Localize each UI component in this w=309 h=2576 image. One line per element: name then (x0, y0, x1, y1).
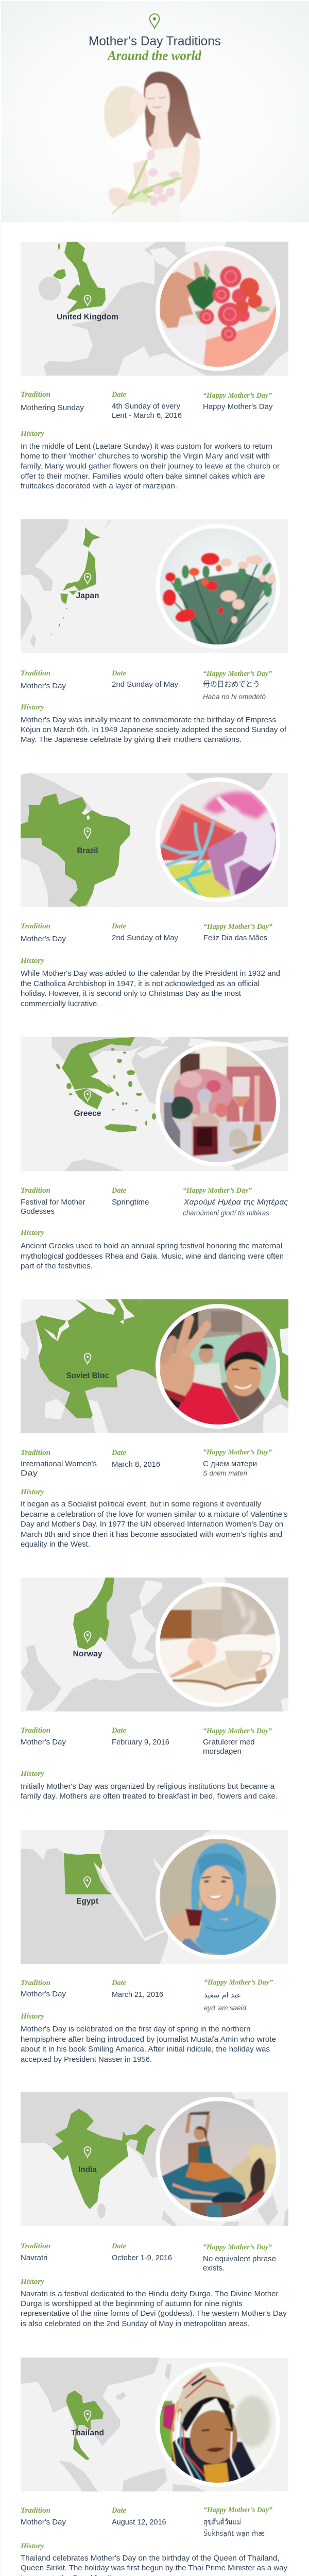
greeting: Haha no hi omedetō (203, 693, 266, 701)
greeting: “Happy Mother’s Day” (203, 923, 272, 931)
date (111, 1979, 163, 1999)
country label: Egypt (76, 1897, 98, 1906)
greeting: สุขสันต์วันแม่ (203, 2518, 241, 2527)
history: History (20, 1229, 44, 1237)
tradition: Tradition (21, 669, 50, 677)
history: History (20, 1488, 44, 1496)
section: United Kingdom (20, 242, 288, 490)
date (111, 2242, 172, 2262)
greeting: Gratulerer med (203, 1738, 255, 1747)
history: family. Many would gather flowers on their journey to leave at the church or (21, 463, 280, 471)
date: Date (111, 391, 126, 399)
date (111, 391, 182, 420)
country label: Brazil (77, 846, 98, 855)
date: Date (111, 1187, 126, 1195)
map: Brazil (21, 773, 288, 907)
section: India (20, 2092, 288, 2328)
tradition (21, 922, 66, 943)
history: the Catholica Archbishop in 1947, it is not acknowledged as an official (21, 980, 260, 988)
history: Initially Mother's Day was organized by religious institutions but became a (21, 1783, 275, 1791)
history: History (20, 957, 44, 965)
tradition (21, 1979, 66, 1998)
history: is also celebrated on the 2nd Sunday of May in metropolitan areas. (21, 2320, 250, 2328)
map: Norway (21, 1578, 288, 1711)
tradition: Day (21, 1469, 38, 1478)
greeting (203, 2506, 272, 2538)
greeting (183, 1187, 288, 1217)
date: Date (111, 669, 126, 677)
greeting (203, 392, 273, 411)
history: family day. Mothers are often treated to breakfast in bed, flowers and cake. (21, 1792, 278, 1801)
pin: Egypt (84, 1877, 91, 1887)
history: Queen Sirikit. The holiday was first begun by the Thai Prime Minister as a way (21, 2564, 288, 2572)
tradition (21, 1449, 97, 1478)
date: Springtime (112, 1198, 149, 1207)
map: United Kingdom (21, 242, 288, 376)
pin: United Kingdom (84, 295, 91, 306)
greeting: S̄uk̄hs̄ạn̒t wạn m̀æ (203, 2530, 265, 2538)
pin: Soviet Bloc (84, 1353, 91, 1364)
tradition: Tradition (21, 1187, 50, 1195)
date (111, 922, 178, 942)
history (20, 2012, 276, 2064)
history: mythological goddesses Rhea and Gaia. Music, wine and dancing were often (21, 1252, 284, 1261)
country label: United Kingdom (57, 313, 118, 321)
greeting: “Happy Mother’s Day” (203, 392, 272, 400)
greeting: С днем матери (203, 1460, 257, 1468)
photo: table with decanter (156, 1042, 280, 1166)
pin: Thailand (84, 2411, 91, 2421)
subtitle: Around the world (107, 48, 202, 63)
country label: Soviet Bloc (66, 1371, 109, 1380)
greeting (203, 1448, 272, 1477)
map: India (21, 2092, 288, 2226)
history: History (20, 430, 44, 438)
greeting (203, 2243, 276, 2273)
greeting: charoúmeni giortí tis mitéras (183, 1209, 269, 1217)
history: home to their 'mother' churches to worship the Virgin Mary and visit with (21, 452, 270, 461)
history: accepted by President Nasser in 1956. (21, 2056, 152, 2064)
history: History (20, 1770, 44, 1778)
greeting: “Happy Mother’s Day” (183, 1187, 252, 1195)
section: Japan (20, 519, 288, 744)
history: part of the festivities. (21, 1262, 93, 1270)
history: While Mother's Day was added to the calendar by the President in 1932 and (21, 970, 280, 978)
date (111, 2506, 166, 2527)
date: March 8, 2016 (112, 1460, 160, 1469)
photo: woman in traditional headdress (156, 2362, 280, 2487)
photo: carnations (156, 524, 280, 649)
history: History (20, 2542, 44, 2550)
country label: India (78, 2165, 97, 2174)
section: Norway (20, 1578, 288, 1801)
tradition (21, 1187, 85, 1216)
date: Date (111, 1449, 126, 1457)
section: Brazil (20, 773, 288, 1008)
pin: Brazil (84, 828, 91, 838)
hero photo: mother and daughter with tulips (101, 72, 201, 222)
photo: tea cup on open book (156, 1582, 280, 1707)
pin: Greece (84, 1091, 91, 1101)
history: March 8th and since then it has become associated with women's rights and (21, 1531, 282, 1539)
history: History (20, 2012, 44, 2021)
history: Navratri is a festival dedicated to the Hindu deity Durga. The Divine Mother (21, 2290, 279, 2298)
history: fruitcakes decorated with a layer of marzipan. (21, 482, 177, 490)
tradition: Mother's Day (21, 1990, 66, 1998)
section: Thailand (20, 2358, 288, 2576)
date: Lent - March 6, 2016 (112, 411, 182, 420)
tradition: Mother's Day (21, 1738, 66, 1747)
history (20, 2278, 287, 2328)
greeting: 母の日おめでとう (203, 680, 260, 689)
date: 2nd Sunday of May (112, 680, 178, 689)
history: representative of the nine forms of Devi (goddess). The western Mother's Day (21, 2310, 287, 2318)
date (111, 1187, 149, 1207)
date: 4th Sunday of every (112, 402, 180, 411)
greeting: Feliz Dia das Mães (203, 934, 267, 942)
tradition: Tradition (21, 2506, 50, 2515)
history: It began as a Socialist political event, but in some regions it eventually (21, 1500, 262, 1509)
tradition: Tradition (21, 1979, 50, 1987)
tradition: Mother's Day (21, 682, 66, 690)
hero header (1, 1, 309, 222)
date: Date (111, 2242, 126, 2250)
tradition: Festival for Mother (21, 1198, 85, 1207)
history: In the middle of Lent (Laetare Sunday) it was custom for workers to return (21, 443, 272, 451)
tradition: Godesses (21, 1207, 55, 1216)
greeting: S dnem materi (203, 1469, 248, 1477)
history: about it in his book Smiling America. After initial ridicule, the holiday was (21, 2045, 270, 2054)
country label: Norway (73, 1650, 102, 1658)
date (111, 1449, 160, 1469)
tradition: Mother's Day (21, 935, 66, 943)
history: commercially lucrative. (21, 1000, 99, 1008)
history: holiday. However, it is second only to Christmas Day as the most (21, 990, 241, 998)
photo: gift boxes (156, 777, 280, 902)
tradition (21, 2506, 66, 2527)
history (20, 1770, 278, 1801)
title: Mother’s Day Traditions (89, 34, 221, 48)
greeting (203, 670, 272, 701)
tradition: Tradition (21, 2242, 50, 2250)
tradition (21, 669, 66, 690)
greeting: Χαρούμέ Ημέρα της Μητέρας (183, 1198, 288, 1207)
photo: woman in blue headscarf (156, 1835, 280, 1959)
history: became a celebration of the love for women similar to a mixture of Valentine's (21, 1511, 288, 1519)
history: Mother's Day was initially meant to commemorate the birthday of Empress (21, 716, 276, 724)
history: Day and Mother's Day. In 1977 the UN observed Internation Women's Day on (21, 1520, 283, 1529)
country label: Japan (76, 591, 99, 600)
icon: location pin (149, 14, 160, 28)
map: Egypt (21, 1830, 288, 1964)
photo: woman making peace sign (156, 1304, 280, 1429)
date: March 21, 2016 (112, 1990, 163, 1999)
map: Greece (21, 1037, 288, 1171)
hero background (1, 1, 309, 222)
date (111, 669, 178, 689)
tradition: Mothering Sunday (21, 403, 84, 412)
pin: Norway (84, 1632, 91, 1642)
history (20, 957, 280, 1008)
date: Date (111, 1979, 126, 1987)
section: Egypt (20, 1830, 288, 2064)
history (20, 430, 280, 490)
greeting: “Happy Mother’s Day” (203, 2506, 272, 2514)
tradition (21, 391, 84, 412)
map: Japan (21, 519, 288, 653)
tradition: Tradition (21, 391, 50, 399)
history: History (20, 703, 44, 711)
history: hempisphere after being introduced by journalist Mustafa Amin who wrote (21, 2036, 276, 2044)
tradition: Navratri (21, 2253, 47, 2262)
greeting (203, 1727, 272, 1756)
greeting: Happy Mother's Day (203, 402, 273, 411)
tradition: Tradition (21, 1726, 50, 1735)
greeting: “Happy Mother’s Day” (203, 1448, 272, 1456)
map: Soviet Bloc (21, 1299, 288, 1433)
history (20, 1488, 288, 1549)
section: Soviet Bloc (20, 1299, 288, 1549)
greeting: “Happy Mother’s Day” (203, 2243, 272, 2251)
history: Mother's Day is celebrated on the first day of spring in the northern (21, 2025, 251, 2033)
greeting: No equivalent phrase (203, 2255, 276, 2263)
history: Durga is worshipped at the beginnning of autumn for nine nights (21, 2300, 243, 2308)
country label: Greece (74, 1109, 101, 1118)
date: 2nd Sunday of May (112, 934, 178, 942)
history (20, 2542, 288, 2576)
greeting: عيد ام سعيد (204, 1991, 241, 1999)
tradition: International Women's (21, 1460, 97, 1468)
date: Date (111, 2506, 126, 2515)
date: February 9, 2016 (112, 1738, 169, 1747)
tradition (21, 1726, 66, 1747)
history (20, 1229, 284, 1270)
greeting: morsdagen (203, 1747, 242, 1756)
date: Date (111, 1726, 126, 1735)
tradition: Mother's Day (21, 2518, 66, 2527)
date: Date (111, 922, 126, 930)
greeting: “Happy Mother’s Day” (203, 1727, 272, 1735)
history: Kōjun on March 6th. In 1949 Japanese society adopted the second Sunday of (21, 726, 287, 734)
section: Greece (20, 1037, 288, 1270)
greeting: eyd 'am saeid (204, 2004, 246, 2012)
country label: Thailand (71, 2429, 104, 2437)
pin: India (84, 2147, 91, 2157)
tradition: Tradition (21, 922, 50, 930)
tradition (21, 2242, 50, 2262)
date: August 12, 2016 (112, 2518, 166, 2527)
date (111, 1726, 169, 1747)
photo: dancers (156, 2097, 280, 2222)
date: October 1-9, 2016 (112, 2253, 172, 2262)
greeting: exists. (203, 2264, 225, 2273)
history: May. The Japanese celebrate by giving their mothers carnations. (21, 736, 242, 744)
history: equality in the West. (21, 1540, 90, 1549)
greeting (203, 923, 272, 942)
history: Thailand celebrates Mother's Day on the birthday of the Queen of Thailand, (21, 2554, 279, 2563)
greeting: “Happy Mother’s Day” (203, 670, 272, 678)
pin: Japan (84, 573, 91, 584)
photo: hand holding roses (156, 246, 280, 371)
history (20, 703, 287, 744)
map: Thailand (21, 2358, 288, 2492)
history: History (20, 2278, 44, 2286)
history: Ancient Greeks used to hold an annual spring festival honoring the maternal (21, 1242, 282, 1250)
greeting (204, 1978, 273, 2012)
history: offer to their mother. Families would often bake simnel cakes which are (21, 472, 265, 481)
greeting: “Happy Mother’s Day” (204, 1978, 273, 1987)
tradition: Tradition (21, 1449, 50, 1457)
